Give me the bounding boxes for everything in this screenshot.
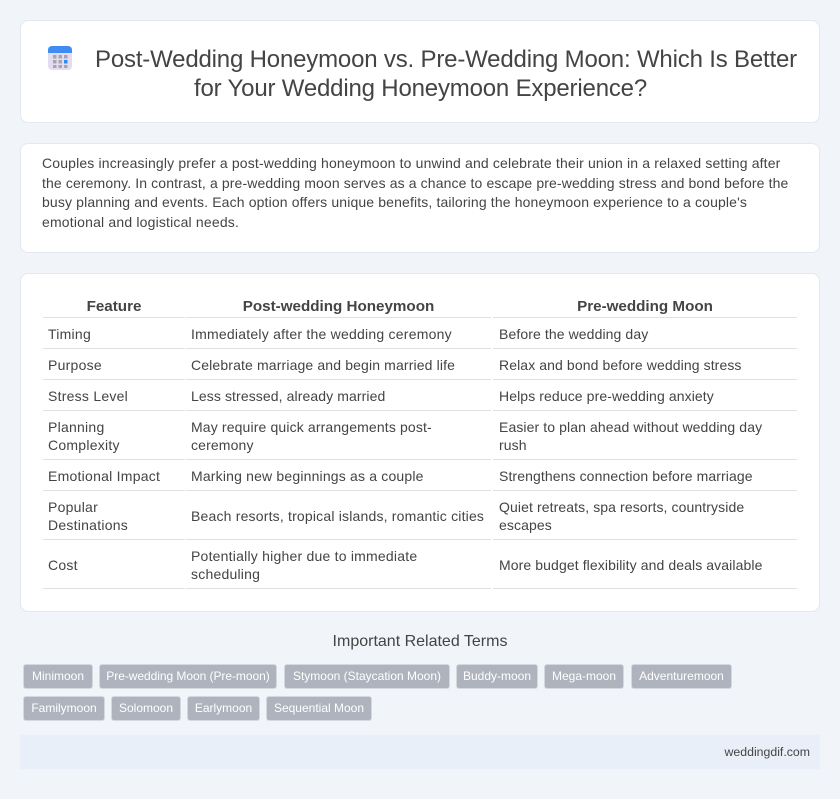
- table rows: Before the wedding day: [499, 326, 648, 342]
- table rows: Stress Level: [48, 388, 128, 404]
- table rows: Potentially higher due to immediate: [191, 548, 417, 564]
- related terms tags: Stymoon (Staycation Moon): [293, 669, 441, 683]
- title: for Your Wedding Honeymoon Experience?: [194, 75, 647, 102]
- table rows: Complexity: [48, 437, 120, 453]
- footer bar: [20, 735, 820, 769]
- table rows: scheduling: [191, 566, 260, 582]
- table rows: Relax and bond before wedding stress: [499, 357, 742, 373]
- table rows: Immediately after the wedding ceremony: [191, 326, 452, 342]
- table rows: May require quick arrangements post-: [191, 419, 432, 435]
- table rows: Easier to plan ahead without wedding day: [499, 419, 762, 435]
- related terms tags: Mega-moon: [552, 669, 616, 683]
- table header: Feature: [87, 298, 141, 315]
- related terms tags: Pre-wedding Moon (Pre-moon): [106, 669, 270, 683]
- table rows: Popular: [48, 499, 98, 515]
- table rows: Celebrate marriage and begin married life: [191, 357, 455, 373]
- table rows: Emotional Impact: [48, 468, 160, 484]
- related terms tags: Adventuremoon: [639, 669, 724, 683]
- table rows: Timing: [48, 326, 91, 342]
- table rows: escapes: [499, 517, 552, 533]
- table rows: Planning: [48, 419, 104, 435]
- footer source: weddingdif.com: [725, 745, 810, 759]
- panel: comparison table: [20, 273, 820, 612]
- related terms tags: Earlymoon: [195, 701, 252, 715]
- related terms heading: Important Related Terms: [333, 633, 507, 650]
- table rows: Strengthens connection before marriage: [499, 468, 753, 484]
- panel: intro: [20, 143, 820, 253]
- title: [95, 46, 797, 102]
- table rows: [43, 317, 797, 589]
- related terms tags: Minimoon: [32, 669, 84, 683]
- table rows: ceremony: [191, 437, 254, 453]
- related terms tags: Familymoon: [31, 701, 97, 715]
- intro text: emotional and logistical needs.: [42, 214, 239, 230]
- title: Post-Wedding Honeymoon vs. Pre-Wedding Moon: Which Is Better: [95, 46, 797, 73]
- table rows: Marking new beginnings as a couple: [191, 468, 424, 484]
- table rows: Quiet retreats, spa resorts, countryside: [499, 499, 744, 515]
- table rows: Less stressed, already married: [191, 388, 385, 404]
- table rows: Destinations: [48, 517, 128, 533]
- table rows: More budget flexibility and deals available: [499, 557, 762, 573]
- related terms tags: Sequential Moon: [274, 701, 364, 715]
- table rows: Purpose: [48, 357, 102, 373]
- table rows: Beach resorts, tropical islands, romantic cities: [191, 508, 484, 524]
- intro text: Couples increasingly prefer a post-wedding honeymoon to unwind and celebrate their union in a relaxed setting after: [42, 155, 780, 171]
- related terms tags: Buddy-moon: [463, 669, 531, 683]
- title card: [20, 20, 820, 123]
- related terms tags: [23, 664, 732, 721]
- table rows: rush: [499, 437, 527, 453]
- intro text: busy planning and events. Each option offers unique benefits, tailoring the honeymoon experience to a couple's: [42, 194, 747, 210]
- table rows: Cost: [48, 557, 78, 573]
- header: pre-wedding moon: Pre-wedding Moon: [577, 298, 713, 315]
- table rows: Helps reduce pre-wedding anxiety: [499, 388, 714, 404]
- intro text: [42, 155, 788, 230]
- icon: calendar: [48, 46, 72, 70]
- header: post-wedding honeymoon: Post-wedding Honeymoon: [243, 298, 434, 315]
- intro text: the ceremony. In contrast, a pre-wedding moon serves as a chance to escape pre-wedding stress and bond before the: [42, 174, 788, 190]
- related terms tags: Solomoon: [119, 701, 173, 715]
